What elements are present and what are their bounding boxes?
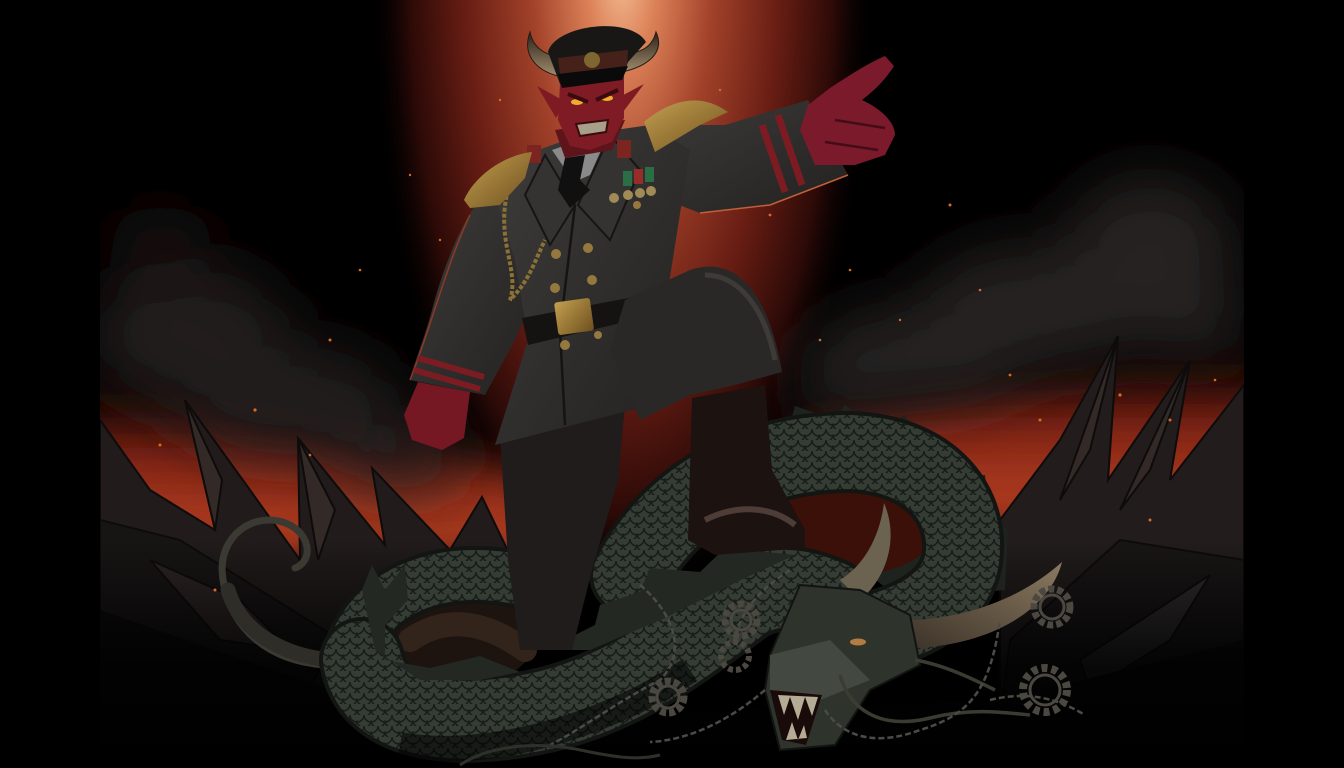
officer figure [404, 26, 895, 650]
cap visor [558, 66, 628, 88]
left epaulette [464, 152, 532, 208]
pointing arm rim light [700, 175, 848, 213]
jagged rocks right [999, 336, 1244, 678]
standing leg [500, 405, 625, 650]
coat centre seam [560, 205, 575, 425]
head shape [765, 585, 920, 750]
loop interior [396, 604, 525, 670]
knee highlight [705, 275, 775, 360]
brows and mouth [568, 90, 618, 102]
hole under rear coil [788, 493, 922, 572]
jagged rocks left [100, 400, 508, 644]
left arm rim light [410, 215, 470, 380]
coil underside shadow [400, 670, 690, 749]
tie [558, 155, 590, 208]
eyes [571, 95, 613, 105]
cap badge [584, 52, 600, 68]
lava horizon left [100, 386, 508, 557]
horns [528, 32, 659, 76]
belt [522, 295, 645, 345]
dragon head [765, 503, 1062, 750]
dragon front coil outline [362, 589, 830, 720]
chains [550, 570, 1085, 745]
coat buttons [550, 201, 641, 350]
embers [158, 89, 1216, 592]
dragon top loop scales [352, 575, 530, 650]
gears [652, 589, 1070, 713]
shirt collar [552, 147, 600, 180]
pointing hand [800, 56, 895, 165]
dark ground [100, 610, 1244, 768]
upper horn [840, 503, 891, 600]
raised thigh [610, 267, 782, 420]
snout shade [770, 640, 870, 700]
dragon rear spines [665, 406, 1007, 591]
long horn [905, 562, 1062, 648]
dragon rear coil outline [630, 452, 963, 630]
dragon [222, 405, 1008, 749]
dragon teeth [778, 695, 818, 740]
pointing arm [674, 100, 848, 213]
dangling cord [460, 746, 660, 765]
dragon mouth [770, 690, 822, 745]
boot [688, 385, 805, 555]
ears [537, 84, 644, 118]
belt buckle [554, 298, 594, 335]
arm cuff stripes [762, 115, 802, 192]
officer cap [548, 26, 646, 84]
coat body [495, 125, 690, 445]
dragon top loop band [352, 575, 530, 650]
sky glow behind the figure [386, 0, 858, 546]
dragon tail curl [222, 520, 325, 665]
whiskers [840, 660, 1030, 721]
smoke cloud left [90, 205, 470, 490]
floor shadow [100, 540, 1244, 768]
left arm [410, 205, 524, 395]
dragon tail base [228, 590, 330, 660]
left fist [404, 382, 470, 450]
teeth [576, 120, 608, 136]
lava horizon right [783, 350, 1244, 518]
cap band [558, 50, 628, 74]
right epaulette [644, 101, 728, 152]
medals [609, 167, 656, 203]
left cuff stripes [414, 358, 484, 389]
dragon front spines [362, 548, 795, 680]
dragon front coil scales [362, 589, 830, 720]
boot highlight [705, 509, 795, 525]
dragon rear coil scales [630, 452, 963, 630]
inner coil belly [410, 624, 525, 650]
neck [555, 120, 625, 158]
smoke cloud right [790, 175, 1250, 412]
collar tabs [527, 140, 631, 163]
dragon eye [850, 638, 866, 646]
face [558, 76, 624, 150]
gold aiguillette [504, 190, 545, 300]
lapels [525, 135, 640, 245]
